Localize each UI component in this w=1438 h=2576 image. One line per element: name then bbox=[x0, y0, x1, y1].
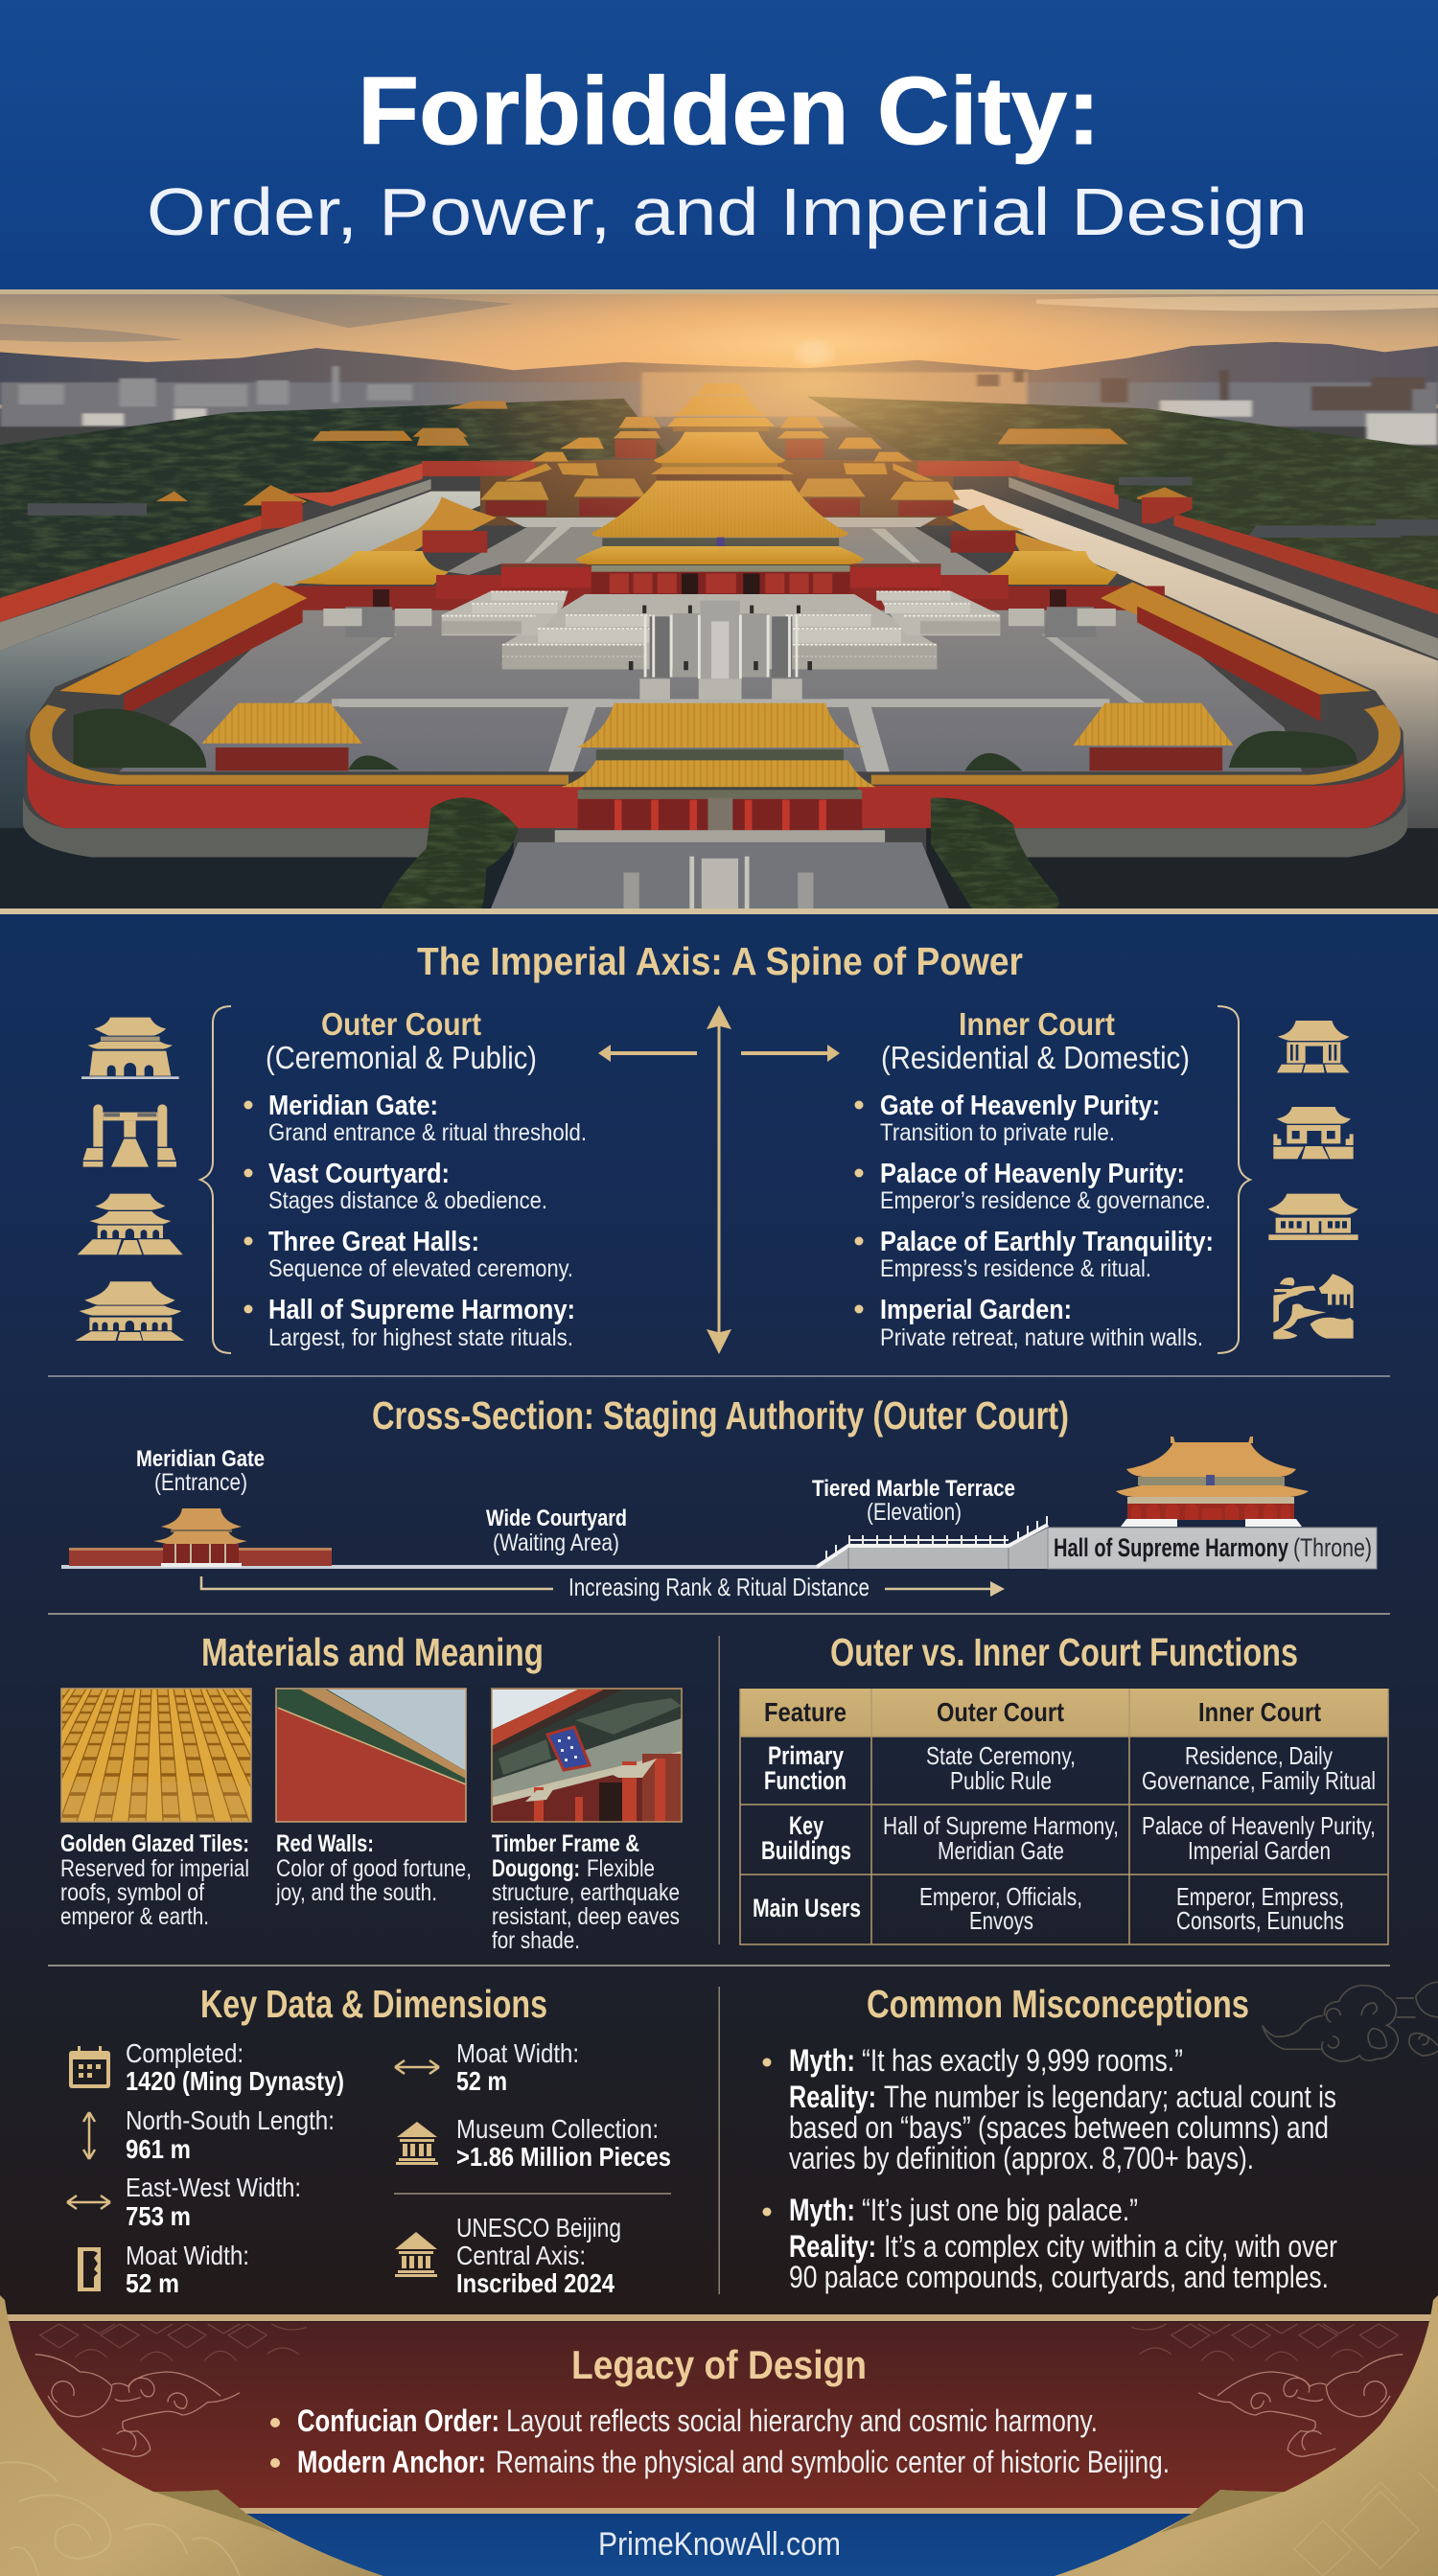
caption: golden glazed tiles: Reserved for imperial bbox=[60, 1855, 249, 1882]
bullet: modern anchor: Remains the physical and symbolic center of historic Beijing. bbox=[496, 2445, 1170, 2479]
caption: timber frame and dougong: structure, earthquake bbox=[492, 1879, 680, 1906]
data: moat width bbox=[126, 2241, 249, 2298]
divider: data column bbox=[394, 2193, 671, 2195]
icons: outer court column bbox=[75, 1018, 184, 1341]
list: inner court items: Private retreat, nature within walls. bbox=[880, 1324, 1203, 1351]
data: moat width 2 bbox=[456, 2038, 579, 2096]
image: red walls bbox=[276, 1689, 466, 1822]
data: completed: Completed: bbox=[126, 2038, 244, 2068]
data: east-west width: East-West Width: bbox=[126, 2173, 301, 2202]
caption: golden glazed tiles bbox=[60, 1830, 249, 1930]
bullet: confucian order bbox=[270, 2404, 1098, 2438]
caption: timber frame and dougong: Flexible bbox=[587, 1855, 655, 1882]
table: key buildings row: Buildings bbox=[761, 1836, 851, 1865]
myth one: Reality: bbox=[789, 2080, 876, 2114]
arrow: increasing rank and ritual distance bbox=[201, 1573, 1005, 1601]
myth two: It’s a complex city within a city, with over bbox=[884, 2229, 1337, 2264]
hero foreground: front gate and outer wall bbox=[23, 582, 1407, 908]
list: inner court items: Imperial Garden: bbox=[880, 1295, 1072, 1325]
table: main users row: Emperor, Officials, bbox=[919, 1882, 1082, 1911]
caption: red walls: Red Walls: bbox=[276, 1830, 374, 1857]
bullet: confucian order: Layout reflects social hierarchy and cosmic harmony. bbox=[506, 2404, 1098, 2438]
panel: key data and dimensions bbox=[67, 1982, 671, 2298]
label: hall of supreme harmony: Hall of Supreme Harmony bbox=[1054, 1533, 1288, 1562]
bracket: outer court bbox=[200, 1006, 231, 1353]
table: header row: Outer Court bbox=[937, 1697, 1064, 1727]
panel: outer court bbox=[244, 1006, 587, 1351]
table: primary function row: Public Rule bbox=[950, 1766, 1052, 1795]
caption: red walls: joy, and the south. bbox=[275, 1879, 437, 1906]
data: moat width 2: 52 m bbox=[456, 2066, 507, 2096]
icon: east-west arrow 2 bbox=[395, 2060, 439, 2074]
panel: materials and meaning bbox=[0, 1630, 682, 1954]
bullet: modern anchor bbox=[270, 2445, 1170, 2479]
myth one: “It has exactly 9,999 rooms.” bbox=[862, 2043, 1183, 2078]
decoration: cloud left bbox=[35, 2355, 240, 2456]
gold corner right bbox=[1055, 2295, 1438, 2576]
outer court title: Outer Court bbox=[321, 1006, 481, 1042]
label: tiered marble terrace: (Elevation) bbox=[867, 1499, 962, 1526]
list: outer court items: Meridian Gate: bbox=[268, 1091, 438, 1121]
data: completed bbox=[126, 2038, 344, 2096]
data: east-west width bbox=[126, 2173, 301, 2231]
myth one bbox=[763, 2043, 1336, 2175]
myth one: based on “bays” (spaces between columns) and bbox=[789, 2110, 1329, 2145]
panel: common misconceptions bbox=[763, 1982, 1337, 2294]
icon: museum bbox=[396, 2122, 438, 2165]
icon: moat bbox=[78, 2247, 101, 2291]
myth two: “It’s just one big palace.” bbox=[862, 2193, 1138, 2227]
icon: calendar bbox=[69, 2046, 110, 2088]
table: grid lines bbox=[740, 1689, 1388, 1944]
icon: north-south arrow bbox=[83, 2112, 95, 2159]
data: completed: 1420 (Ming Dynasty) bbox=[126, 2066, 344, 2096]
data: museum collection: >1.86 Million Pieces bbox=[456, 2142, 671, 2172]
table: key buildings row: Hall of Supreme Harmony, bbox=[883, 1811, 1119, 1840]
inner court title: Inner Court bbox=[959, 1006, 1115, 1042]
divider bbox=[48, 1375, 1390, 1377]
icons: inner court column bbox=[1268, 1021, 1358, 1339]
footer site name: PrimeKnowAll.com bbox=[598, 2526, 841, 2563]
drawing: meridian gate building bbox=[69, 1508, 332, 1567]
label: wide courtyard: Wide Courtyard bbox=[486, 1506, 627, 1531]
list: outer court items: Three Great Halls: bbox=[268, 1227, 479, 1257]
list: inner court items: Palace of Earthly Tranquility: bbox=[880, 1227, 1214, 1257]
outer court subtitle: (Ceremonial & Public) bbox=[266, 1040, 537, 1075]
subtitle: Order, Power, and Imperial Design bbox=[147, 174, 1308, 249]
drawing: tiered marble terrace bbox=[817, 1516, 1048, 1569]
heading: key data: Key Data & Dimensions bbox=[200, 1982, 547, 2026]
caption: red walls bbox=[275, 1830, 472, 1906]
icon: three great halls bbox=[78, 1194, 183, 1254]
list: inner court items: Empress’s residence & ritual. bbox=[880, 1255, 1151, 1282]
list: outer court items: Sequence of elevated ceremony. bbox=[268, 1255, 573, 1282]
heading: misconceptions: Common Misconceptions bbox=[867, 1982, 1249, 2026]
title: Forbidden City: bbox=[358, 58, 1101, 165]
arrow: increasing rank and ritual distance: Increasing Rank & Ritual Distance bbox=[568, 1573, 870, 1601]
table: key buildings row bbox=[761, 1811, 1376, 1865]
arrow: to inner court bbox=[741, 1045, 840, 1062]
drawing: throne platform bbox=[1048, 1528, 1377, 1569]
list: outer court items: Vast Courtyard: bbox=[268, 1159, 450, 1189]
label: meridian gate bbox=[136, 1446, 265, 1496]
table: primary function row: State Ceremony, bbox=[926, 1741, 1076, 1770]
decoration: diamond pattern right bbox=[1131, 2324, 1398, 2360]
myth two: Reality: bbox=[789, 2229, 876, 2264]
divider bbox=[48, 1965, 1390, 1966]
table: primary function row: Function bbox=[764, 1766, 847, 1795]
table: header row: Feature bbox=[764, 1697, 847, 1727]
hero frame bbox=[0, 289, 1438, 914]
table: header row: Inner Court bbox=[1198, 1697, 1321, 1727]
heading: cross-section: Cross-Section: Staging Authority (Outer Court) bbox=[372, 1393, 1069, 1438]
drawing: hall of supreme harmony bbox=[1116, 1437, 1309, 1527]
hero centre: halls and marble terraces bbox=[288, 383, 1145, 706]
data: north-south length: North-South Length: bbox=[126, 2105, 335, 2135]
marble terrace tiers bbox=[442, 591, 1000, 678]
gold corner left bbox=[0, 2295, 383, 2576]
hero photo: aerial view of the palace at sunset bbox=[0, 294, 1438, 908]
icon: gate of heavenly purity bbox=[1277, 1021, 1350, 1072]
data: east-west width: 753 m bbox=[126, 2201, 191, 2231]
sun glow on axis bbox=[439, 294, 1185, 542]
icon: unesco bbox=[395, 2232, 437, 2277]
table: main users row bbox=[753, 1882, 1344, 1935]
heading: materials: Materials and Meaning bbox=[201, 1630, 544, 1674]
page background bbox=[0, 913, 1438, 2322]
list: inner court items: Palace of Heavenly Purity: bbox=[880, 1159, 1185, 1189]
myth two bbox=[763, 2193, 1337, 2294]
heading: table: Outer vs. Inner Court Functions bbox=[830, 1630, 1298, 1674]
list: outer court items: Hall of Supreme Harmony: bbox=[268, 1295, 575, 1325]
icon: hall of supreme harmony bbox=[75, 1281, 184, 1341]
icon: meridian gate tower bbox=[81, 1018, 179, 1079]
myth one: The number is legendary; actual count is bbox=[884, 2080, 1336, 2114]
decoration: cloud right bbox=[1198, 2355, 1403, 2456]
myth two: 90 palace compounds, courtyards, and temples. bbox=[789, 2260, 1329, 2294]
myth two: Myth: bbox=[789, 2193, 855, 2227]
list: inner court items: Transition to private rule. bbox=[880, 1119, 1115, 1146]
header banner bbox=[0, 0, 1438, 290]
footer band: legacy of design bbox=[0, 2295, 1438, 2576]
caption: timber frame and dougong: Dougong: bbox=[492, 1855, 580, 1882]
data: moat width 2: Moat Width: bbox=[456, 2038, 579, 2068]
data: unesco: Central Axis: bbox=[456, 2241, 586, 2270]
arrow: to outer court bbox=[598, 1045, 697, 1062]
data: unesco: UNESCO Beijing bbox=[456, 2213, 621, 2242]
label: meridian gate: Meridian Gate bbox=[136, 1446, 265, 1472]
panel: inner court bbox=[855, 1006, 1214, 1351]
data: unesco bbox=[456, 2213, 621, 2298]
icon: east-west arrow bbox=[67, 2196, 110, 2209]
caption: golden glazed tiles: emperor & earth. bbox=[60, 1903, 209, 1930]
table: primary function row: Primary bbox=[768, 1741, 844, 1770]
image: golden glazed tiles bbox=[60, 1688, 252, 1823]
table: key buildings row: Imperial Garden bbox=[1188, 1836, 1331, 1865]
section: The Imperial Axis bbox=[75, 939, 1358, 1354]
caption: golden glazed tiles: Golden Glazed Tiles: bbox=[60, 1830, 249, 1857]
ground line bbox=[61, 1565, 819, 1569]
label: meridian gate: (Entrance) bbox=[154, 1469, 247, 1496]
data: museum collection bbox=[456, 2114, 671, 2172]
list: inner court items bbox=[855, 1091, 1214, 1351]
caption: timber frame and dougong: for shade. bbox=[492, 1927, 580, 1954]
myth one: varies by definition (approx. 8,700+ bays). bbox=[789, 2141, 1254, 2175]
icon: imperial garden bbox=[1273, 1274, 1354, 1339]
bracket: inner court bbox=[1218, 1006, 1250, 1353]
label: wide courtyard bbox=[486, 1506, 627, 1556]
heading: imperial axis: The Imperial Axis: A Spine of Power bbox=[417, 939, 1023, 983]
list: outer court items: Largest, for highest state rituals. bbox=[268, 1324, 573, 1351]
caption: timber frame and dougong bbox=[492, 1830, 680, 1954]
data: unesco: Inscribed 2024 bbox=[456, 2268, 615, 2298]
myth one: Myth: bbox=[789, 2043, 855, 2078]
caption: golden glazed tiles: roofs, symbol of bbox=[60, 1879, 204, 1906]
image: timber frame and dougong bbox=[492, 1689, 682, 1822]
vertical divider: materials and table bbox=[719, 1636, 720, 1944]
list: inner court items: Gate of Heavenly Purity: bbox=[880, 1091, 1160, 1121]
bullet: modern anchor: Modern Anchor: bbox=[297, 2445, 486, 2479]
caption: timber frame and dougong: resistant, deep eaves bbox=[492, 1903, 680, 1930]
table: primary function row: Residence, Daily bbox=[1185, 1741, 1333, 1770]
heading: legacy of design: Legacy of Design bbox=[571, 2342, 867, 2387]
inner court subtitle: (Residential & Domestic) bbox=[881, 1040, 1190, 1075]
table: main users row: Emperor, Empress, bbox=[1176, 1882, 1344, 1911]
table: main users row: Envoys bbox=[969, 1906, 1033, 1935]
caption: red walls: Color of good fortune, bbox=[276, 1855, 472, 1882]
data: north-south length: 961 m bbox=[126, 2134, 191, 2164]
decoration: cloud top right bbox=[1263, 1982, 1438, 2061]
label: hall of supreme harmony: (Throne) bbox=[1293, 1533, 1372, 1562]
decoration: diamond pattern left bbox=[40, 2324, 307, 2360]
table: main users row: Consorts, Eunuchs bbox=[1176, 1906, 1344, 1935]
list: outer court items: Stages distance & obedience. bbox=[268, 1187, 547, 1214]
list: outer court items: Grand entrance & ritual threshold. bbox=[268, 1119, 587, 1146]
icon: palace of earthly tranquility bbox=[1268, 1194, 1358, 1240]
table: key buildings row: Meridian Gate bbox=[938, 1836, 1064, 1865]
panel: outer vs inner court table bbox=[740, 1630, 1388, 1944]
list: outer court items bbox=[244, 1091, 587, 1351]
label: tiered marble terrace bbox=[812, 1476, 1015, 1526]
icon: palace of heavenly purity bbox=[1273, 1107, 1354, 1159]
section: cross-section diagram bbox=[61, 1393, 1377, 1601]
axis arrow: vertical spine bbox=[707, 1005, 731, 1354]
label: wide courtyard: (Waiting Area) bbox=[493, 1530, 619, 1556]
vertical divider: data and myths bbox=[719, 1987, 720, 2294]
list: inner court items: Emperor’s residence & governance. bbox=[880, 1187, 1211, 1214]
table: key buildings row: Key bbox=[789, 1811, 823, 1840]
caption: timber frame and dougong: Timber Frame & bbox=[492, 1830, 639, 1857]
divider bbox=[48, 1613, 1390, 1615]
data: north-south length bbox=[126, 2105, 335, 2164]
table: header row bbox=[740, 1689, 1388, 1736]
data: museum collection: Museum Collection: bbox=[456, 2114, 659, 2144]
icon: ceremonial gateway bbox=[83, 1104, 176, 1167]
table: primary function row: Governance, Family Ritual bbox=[1142, 1766, 1376, 1795]
bullet: confucian order: Confucian Order: bbox=[297, 2404, 499, 2438]
table: key buildings row: Palace of Heavenly Purity, bbox=[1142, 1811, 1376, 1840]
table: primary function row bbox=[764, 1741, 1376, 1795]
label: tiered marble terrace: Tiered Marble Terrace bbox=[812, 1476, 1015, 1502]
table: main users row: Main Users bbox=[753, 1894, 861, 1922]
data: moat width: 52 m bbox=[126, 2268, 179, 2298]
data: moat width: Moat Width: bbox=[126, 2241, 249, 2270]
